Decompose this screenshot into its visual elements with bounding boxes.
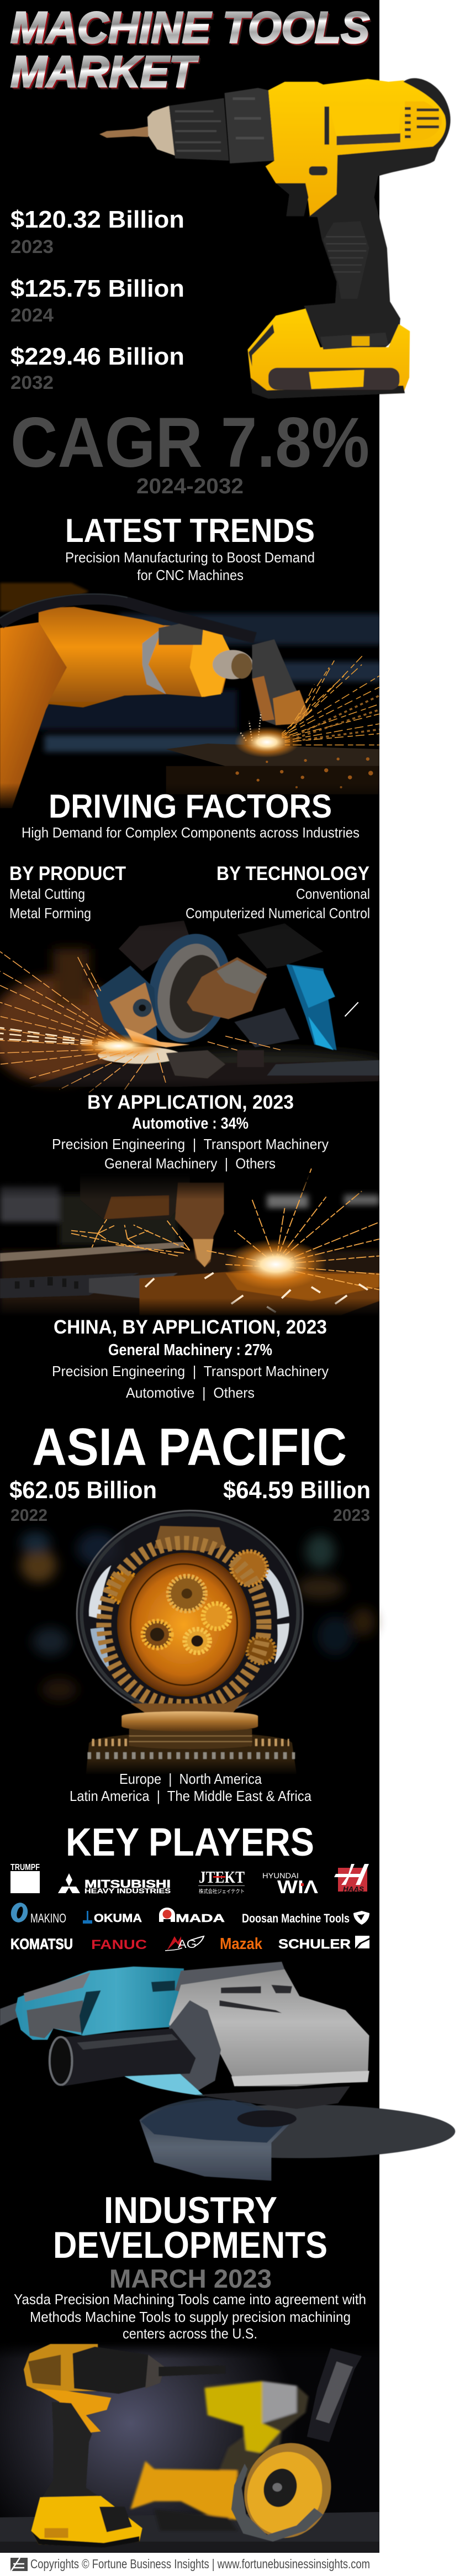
- market size 2023: 2023: [10, 236, 54, 257]
- market size 2024: 2024: [10, 305, 54, 326]
- heading: key players: KEY PLAYERS: [66, 1821, 314, 1864]
- logo: JTEKT: JTEKT: [199, 1867, 245, 1887]
- segment: by product: BY PRODUCT: [9, 863, 126, 884]
- date: MARCH 2023: [109, 2264, 272, 2293]
- illustration: blue angle grinder: [0, 1962, 455, 2180]
- market size 2024: $125.75 Billion: [10, 275, 184, 302]
- market size 2023: [10, 206, 184, 257]
- panel: China by application: [52, 1316, 329, 1401]
- segment: by technology: BY TECHNOLOGY: [216, 863, 369, 884]
- heading: Asia Pacific: ASIA PACIFIC: [32, 1418, 347, 1477]
- logo: Hyundai WIA: HYUNDAI: [262, 1871, 299, 1880]
- text: development description: centers across the U.S.: [123, 2325, 257, 2342]
- text: other regions: Europe | North America: [119, 1771, 262, 1787]
- segment: by product: [9, 863, 126, 921]
- regional value 2023: [223, 1477, 371, 1525]
- logo: Mitsubishi Heavy Industries: HEAVY INDUSTRIES: [84, 1887, 171, 1895]
- logo: Doosan Machine Tools: Doosan Machine Tools: [242, 1911, 350, 1925]
- logo: Hyundai WIA: [262, 1871, 318, 1897]
- other segments: General Machinery | Others: [104, 1155, 276, 1172]
- logo: JTEKT: [198, 1867, 245, 1895]
- other segments: Precision Engineering | Transport Machinery: [52, 1136, 329, 1152]
- regional value 2022: $62.05 Billion: [9, 1477, 157, 1504]
- heading: latest trends: LATEST TRENDS: [65, 512, 315, 549]
- leading segment: General Machinery : 27%: [108, 1341, 272, 1359]
- illustration: robot arm welding: [0, 583, 385, 884]
- title: MARKET: [13, 49, 200, 98]
- illustration: angle grinder with sparks: [0, 920, 379, 1093]
- segment: by technology: [186, 863, 370, 921]
- title: MACHINE TOOLS: [10, 3, 369, 52]
- illustration: gears in a glass globe: [0, 1510, 379, 1776]
- logo: Makino: [9, 1901, 66, 1925]
- footer bar: [0, 2553, 465, 2576]
- market size 2023: $120.32 Billion: [10, 206, 184, 233]
- title: MACHINE TOOLS: [12, 4, 370, 53]
- market size 2032: [10, 343, 184, 393]
- logo: Okuma: OKUMA: [94, 1912, 142, 1925]
- text: driving factors description: High Demand for Complex Components across Industries: [22, 824, 360, 841]
- icon: Fortune Business Insights logo: [10, 2558, 28, 2571]
- segment: by product: Metal Forming: [9, 905, 91, 921]
- text: development description: [14, 2291, 366, 2342]
- logo: Okuma: [83, 1911, 142, 1925]
- logo: Haas: HAAS: [343, 1885, 364, 1893]
- regional value 2022: 2022: [10, 1505, 47, 1525]
- text: development description: Methods Machine Tools to supply precision machining: [30, 2309, 351, 2325]
- title: [10, 3, 371, 98]
- heading: driving factors: DRIVING FACTORS: [49, 788, 332, 825]
- text: latest trends description: [65, 549, 315, 583]
- logo: Komatsu: KOMATSU: [10, 1936, 73, 1952]
- market size 2024: [10, 275, 184, 326]
- heading: industry developments: DEVELOPMENTS: [53, 2224, 327, 2266]
- logo: Schuler: [278, 1936, 369, 1952]
- heading: industry developments: INDUSTRY: [104, 2189, 277, 2231]
- logo: Amada: [159, 1908, 225, 1925]
- logo: Makino: MAKINO: [30, 1911, 66, 1925]
- segment: by technology: Computerized Numerical Control: [186, 905, 370, 921]
- CAGR period: 2024-2032: [136, 475, 244, 498]
- heading: by application: BY APPLICATION, 2023: [87, 1092, 294, 1113]
- segment: by technology: Conventional: [296, 886, 370, 902]
- heading: China by application: CHINA, BY APPLICATION, 2023: [54, 1316, 327, 1338]
- other segments: Automotive | Others: [126, 1384, 255, 1401]
- copyright text: Copyrights © Fortune Business Insights | www.fortunebusinessinsights.com: [30, 2557, 370, 2571]
- regional value 2022: [9, 1477, 157, 1525]
- segment: by product: Metal Cutting: [9, 886, 85, 902]
- logo: Fanuc: FANUC: [91, 1937, 147, 1952]
- text: latest trends description: Precision Manufacturing to Boost Demand: [65, 549, 315, 566]
- logo: Schuler: SCHULER: [278, 1937, 351, 1952]
- regional value 2023: $64.59 Billion: [223, 1477, 371, 1504]
- logo: Hyundai WIA: WIΛ: [277, 1877, 318, 1897]
- title: MACHINE TOOLS: [13, 5, 371, 54]
- illustration: yellow cordless drill: [99, 78, 451, 399]
- logo: Mazak: Mazak: [220, 1935, 263, 1953]
- heading: industry developments: [53, 2189, 327, 2266]
- title: MARKET: [12, 48, 199, 97]
- logo: MAG: [165, 1936, 204, 1951]
- illustration: yellow power tools: [0, 2343, 379, 2553]
- market size 2032: $229.46 Billion: [10, 343, 184, 370]
- market size 2032: 2032: [10, 372, 54, 393]
- regional value 2023: 2023: [333, 1505, 370, 1525]
- other segments: Precision Engineering | Transport Machinery: [52, 1363, 329, 1379]
- CAGR figure: CAGR 7.8%: [10, 403, 369, 482]
- text: latest trends description: for CNC Machines: [137, 567, 244, 583]
- logo: Trumpf: [10, 1863, 40, 1893]
- other segments: [52, 1136, 329, 1172]
- logo: Haas: [334, 1864, 369, 1893]
- logo: Trumpf: TRUMPF: [10, 1863, 40, 1872]
- logo: JTEKT: 株式会社ジェイテクト: [199, 1887, 245, 1895]
- logo: Mitsubishi Heavy Industries: [58, 1873, 171, 1895]
- illustration: CNC machine with sparks: [0, 1168, 385, 1326]
- logo: MAG: AG: [178, 1938, 197, 1951]
- logo: Mitsubishi Heavy Industries: MITSUBISHI: [84, 1878, 171, 1890]
- logo: Amada: MADA: [176, 1913, 225, 1925]
- text: other regions: [70, 1771, 311, 1804]
- title: MARKET: [10, 47, 199, 96]
- panel: by application: [52, 1092, 329, 1172]
- other segments: [52, 1363, 329, 1401]
- text: development description: Yasda Precision Machining Tools came into agreement with: [14, 2291, 366, 2308]
- leading segment: Automotive : 34%: [132, 1115, 249, 1132]
- text: other regions: Latin America | The Middle East & Africa: [70, 1788, 311, 1804]
